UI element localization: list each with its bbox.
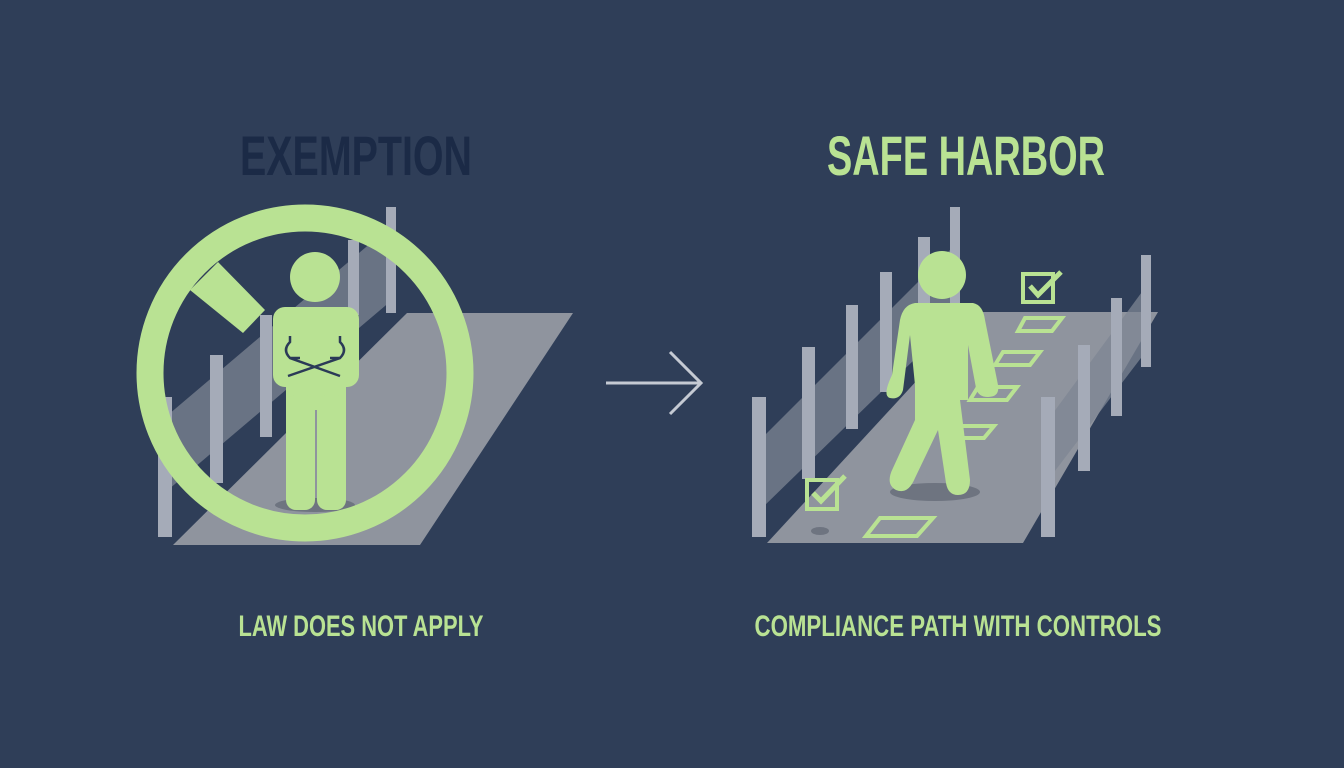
panel: exemption illustration bbox=[150, 207, 573, 545]
platform bbox=[173, 313, 573, 545]
icon: checkbox top bbox=[1023, 272, 1061, 302]
left fence wall bbox=[760, 245, 955, 510]
caption: compliance path: COMPLIANCE PATH WITH CONTROLS bbox=[754, 610, 1162, 643]
title: safe harbor: SAFE HARBOR bbox=[827, 124, 1105, 187]
arrow bbox=[606, 352, 701, 414]
panel: safe harbor illustration bbox=[752, 207, 1158, 543]
title: exemption: EXEMPTION bbox=[240, 124, 472, 187]
fence wall bbox=[162, 225, 392, 495]
icon: prohibition circle bbox=[150, 218, 460, 528]
right fence wall bbox=[1048, 285, 1147, 480]
fence posts bbox=[752, 207, 1151, 537]
caption: law does not apply: LAW DOES NOT APPLY bbox=[238, 610, 484, 643]
icon: checkbox bottom bbox=[807, 476, 845, 535]
platform bbox=[767, 312, 1158, 543]
person walking bbox=[886, 251, 998, 501]
person with crossed arms bbox=[273, 252, 359, 512]
floor checkpoints bbox=[866, 318, 1062, 536]
fence posts bbox=[158, 207, 396, 537]
